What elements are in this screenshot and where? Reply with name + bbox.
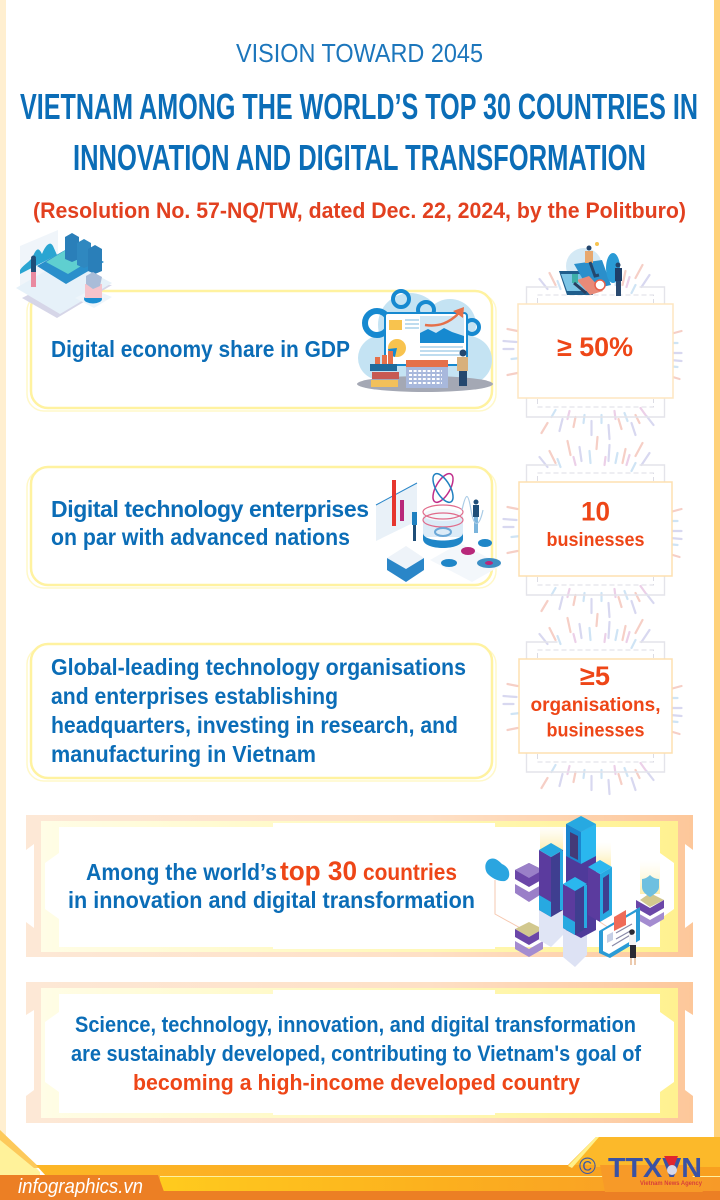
text: goal statement: Science, technology, innovation, and digital transformation bbox=[75, 1012, 636, 1037]
text: enterprises on par: Digital technology enterprises bbox=[51, 496, 369, 522]
subtitle: resolution: (Resolution No. 57-NQ/TW, dated Dec. 22, 2024, by the Politburo) bbox=[33, 198, 686, 223]
title block bbox=[20, 38, 698, 223]
text: at least 5: ≥5 bbox=[580, 661, 610, 691]
logo: ttxvn bbox=[579, 1152, 702, 1187]
value: greater than 50 percent bbox=[504, 242, 682, 439]
text: top 30 line 1: Among the world’s bbox=[86, 859, 277, 885]
text: global-leading organisations: Global-leading technology organisations bbox=[51, 654, 466, 680]
text: top 30 line 1: countries bbox=[363, 859, 457, 885]
text: global-leading organisations bbox=[51, 654, 466, 767]
value: 10 businesses bbox=[504, 437, 682, 617]
text: top 30 line 1: top 30 bbox=[280, 856, 357, 886]
value: at least 5 organisations bbox=[504, 614, 682, 794]
panel: global-leading organisations bbox=[27, 644, 496, 781]
text: enterprises on par: on par with advanced nations bbox=[51, 524, 350, 550]
icon: dashboard illustration bbox=[357, 291, 493, 392]
panel: digital technology enterprises bbox=[27, 467, 502, 588]
heading: vision toward 2045: VISION TOWARD 2045 bbox=[236, 38, 483, 68]
footer band bbox=[0, 1130, 720, 1200]
text: 10: 10 bbox=[581, 496, 610, 526]
purple stack upper bbox=[515, 863, 543, 902]
text: businesses: businesses bbox=[546, 529, 645, 551]
text: goal statement bbox=[71, 1012, 642, 1095]
icon: science technology illustration bbox=[376, 471, 502, 582]
text: goal statement: are sustainably developed, contributing to Vietnam's goal of bbox=[71, 1041, 642, 1066]
panel: sustainable development banner bbox=[26, 982, 693, 1123]
text: businesses: businesses bbox=[546, 720, 645, 742]
icon: data towers illustration bbox=[485, 816, 664, 967]
logo: ttxvn: Vietnam News Agency bbox=[640, 1180, 702, 1187]
text: digital economy share: Digital economy share in GDP bbox=[51, 336, 350, 362]
icon: marketing team illustration bbox=[559, 242, 622, 296]
text: global-leading organisations: and enterprises establishing bbox=[51, 683, 338, 709]
text: global-leading organisations: manufacturing in Vietnam bbox=[51, 741, 316, 767]
icon: technology platform illustration bbox=[16, 230, 112, 318]
panel: top 30 banner bbox=[26, 815, 693, 967]
logo: ttxvn: TTXVN bbox=[608, 1152, 702, 1183]
text: infographics.vn: infographics.vn bbox=[18, 1176, 143, 1198]
text: top 30 line 2: in innovation and digital transformation bbox=[68, 887, 475, 913]
shield and right stack bbox=[636, 875, 664, 927]
text: goal statement: becoming a high-income developed country bbox=[133, 1070, 581, 1095]
text: global-leading organisations: headquarters, investing in research, and bbox=[51, 712, 458, 738]
panel: digital economy share bbox=[27, 291, 496, 411]
logo: ttxvn: © bbox=[579, 1153, 596, 1179]
text: organisations: organisations, bbox=[530, 694, 660, 716]
text: enterprises on par bbox=[51, 496, 369, 550]
text: 50 percent: ≥ 50% bbox=[557, 332, 633, 362]
purple stack lower bbox=[515, 922, 543, 957]
